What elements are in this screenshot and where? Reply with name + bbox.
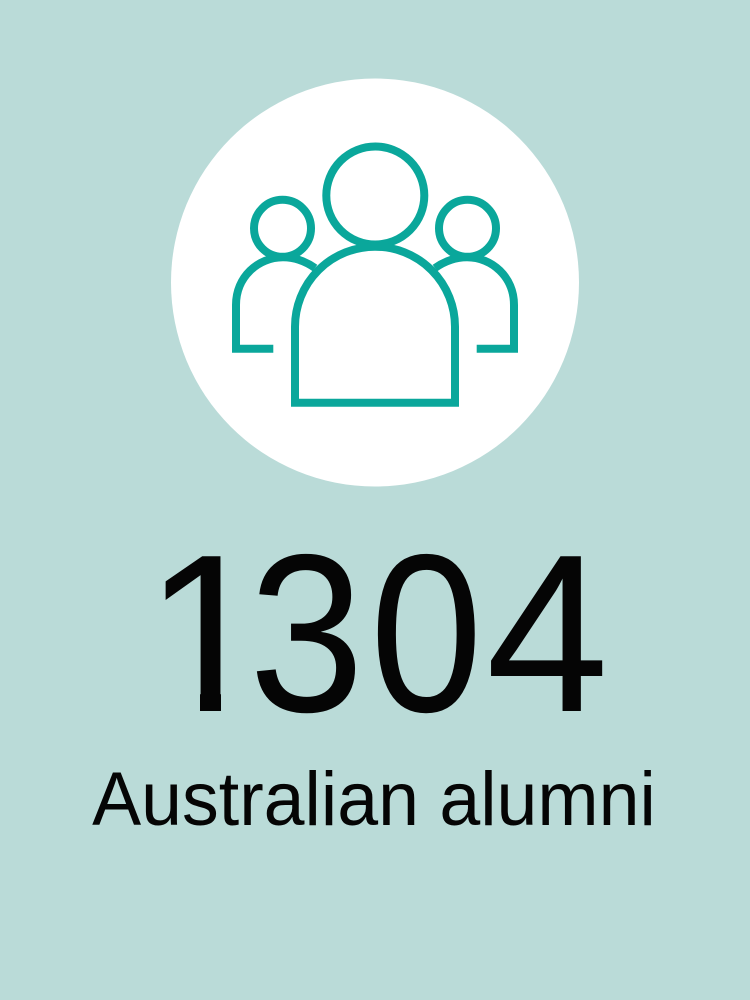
caption: Australian alumni bbox=[92, 757, 656, 842]
big number: 0 bbox=[370, 507, 482, 759]
big number: 3 bbox=[249, 507, 364, 759]
big number bbox=[144, 507, 608, 759]
icon: white circle with three people bbox=[171, 78, 579, 486]
big number: 1 bbox=[144, 507, 269, 759]
big number: 4 bbox=[486, 507, 608, 759]
